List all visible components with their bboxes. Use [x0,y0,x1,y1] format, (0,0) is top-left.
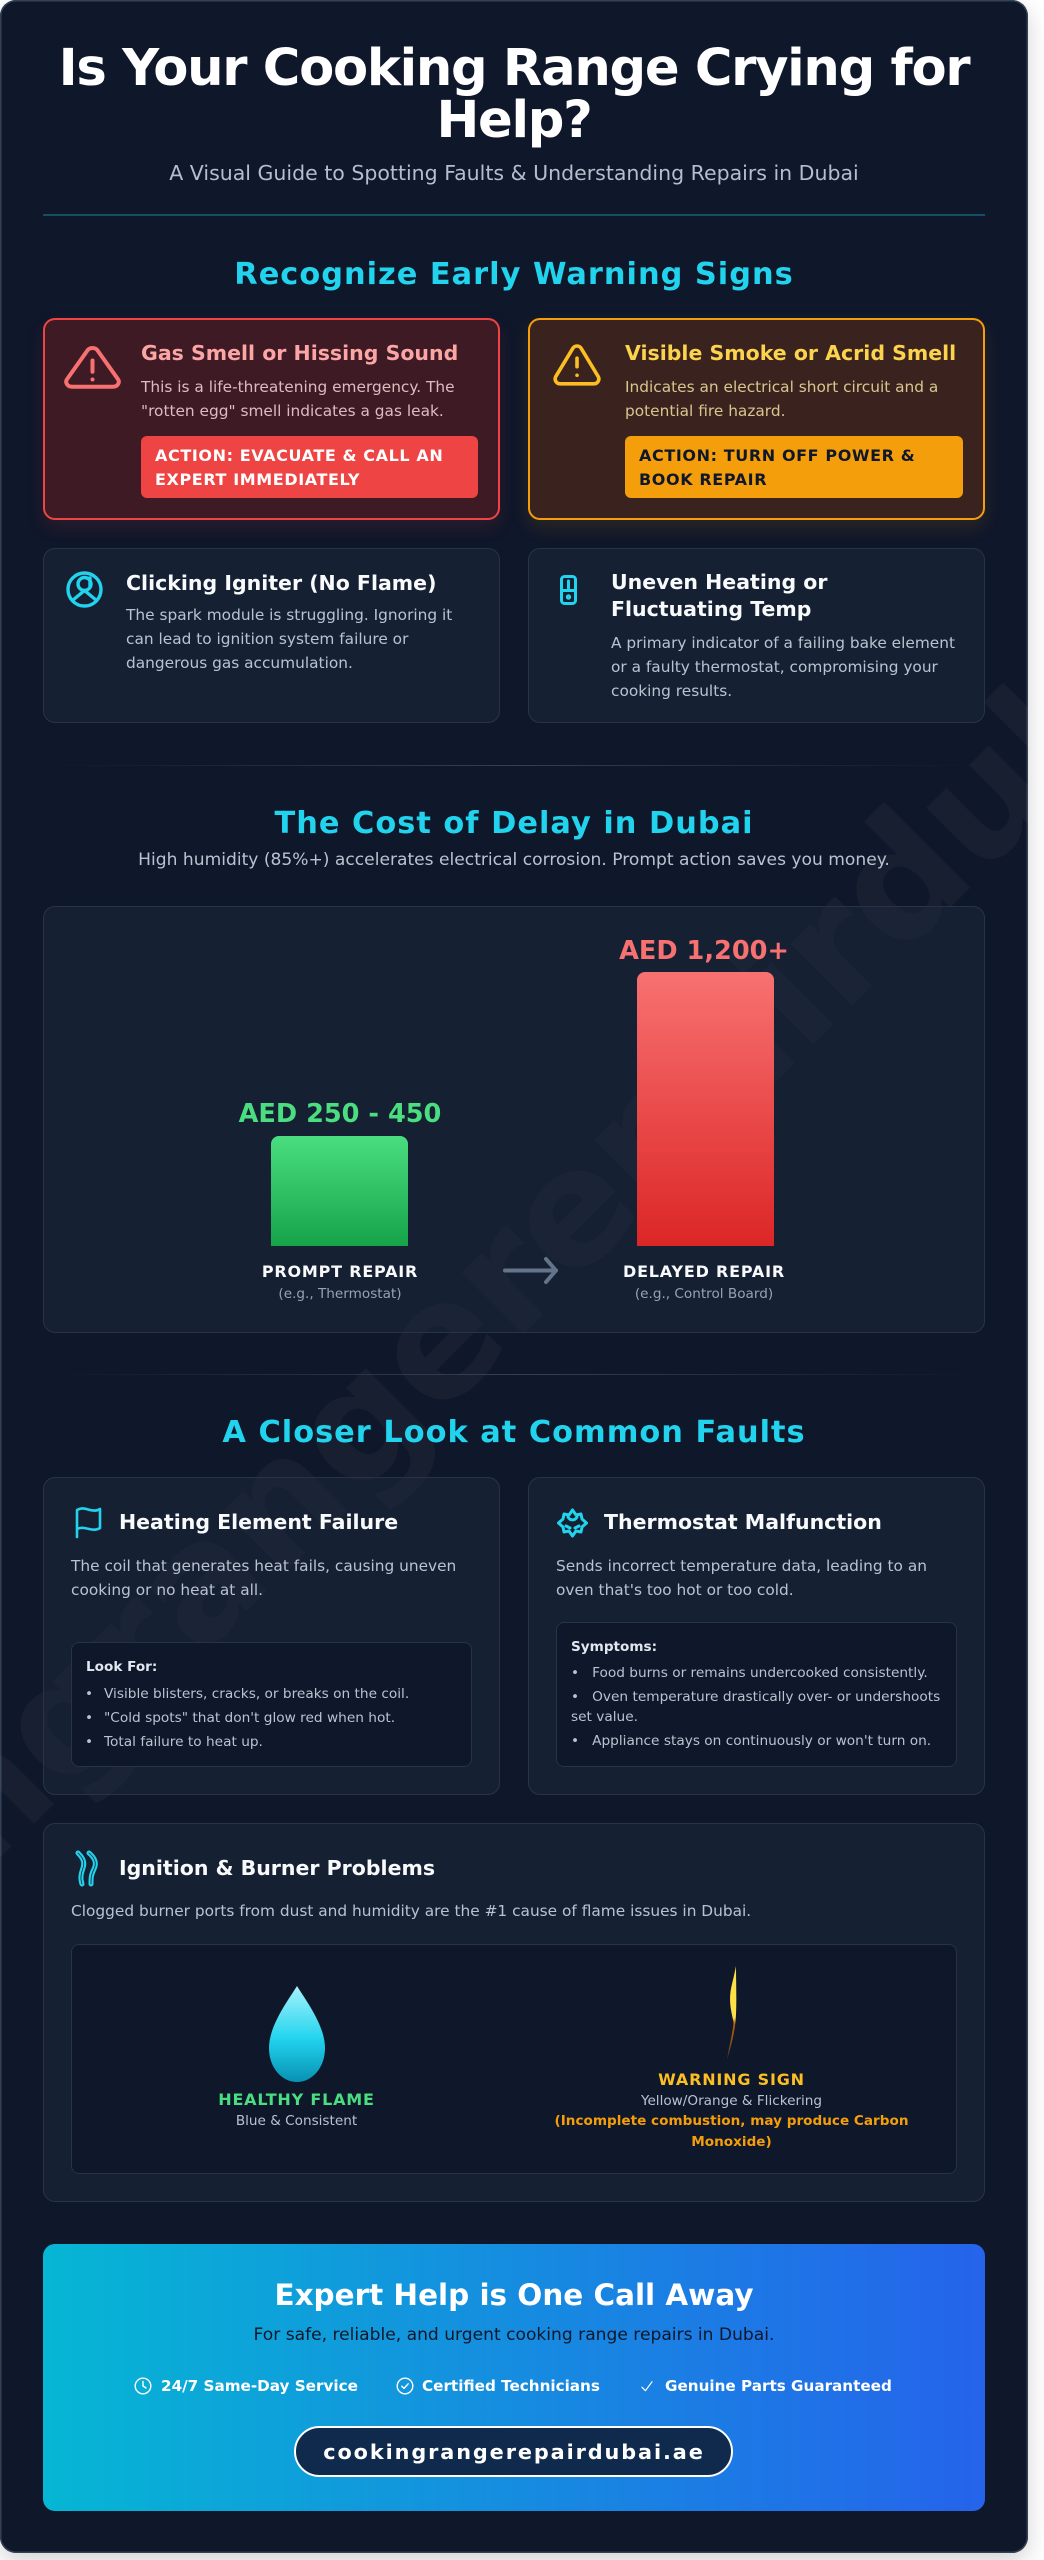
card text: cooking or no heat at all. [71,1581,263,1599]
note: blue and consistent: Blue & Consistent [236,2113,357,2129]
bar: delayed repair [637,972,774,1246]
action text: ACTION: EVACUATE & CALL AN [155,446,443,465]
list [104,1686,409,1750]
action box [625,436,963,498]
cta title: Expert Help is One Call Away [274,2278,754,2312]
look-for box [71,1642,472,1767]
card text: A primary indicator of a failing bake element [611,634,955,652]
action text [639,446,915,489]
card title: Uneven Heating or [611,570,827,594]
card title: Clicking Igniter (No Flame) [126,571,436,595]
note: carbon monoxide warning: (Incomplete combustion, may produce Carbon [554,2113,909,2129]
website address: cookingrangerepairdubai.ae [323,2440,705,2464]
card text: "rotten egg" smell indicates a gas leak. [141,402,444,420]
title [59,38,970,150]
label: delayed repair: DELAYED REPAIR [623,1262,785,1281]
label: warning sign: WARNING SIGN [658,2070,805,2089]
heading: early warning signs: Recognize Early Warning Signs [234,257,794,292]
feature: certified: Certified Technicians [422,2377,600,2395]
icon: thermostat [560,575,577,605]
action text: ACTION: TURN OFF POWER & [639,446,915,465]
card text [611,634,955,700]
list: "Cold spots" that don't glow red when hot. [104,1710,395,1726]
bullets [85,1686,93,1750]
icon: clock [134,2378,152,2394]
action text: BOOK REPAIR [639,470,767,489]
note: carbon monoxide warning [554,2113,909,2150]
card text: can lead to ignition system failure or [126,630,408,648]
note: yellow and flickering: Yellow/Orange & Flickering [641,2093,822,2109]
list: • Oven temperature drastically over- or undershoots [571,1689,940,1705]
card text: This is a life-threatening emergency. The [141,378,455,396]
icon: flag [76,1507,102,1538]
list: • Food burns or remains undercooked consistently. [571,1665,928,1681]
card title: Fluctuating Temp [611,597,811,621]
icon: red warning triangle [64,346,121,389]
action text: EXPERT IMMEDIATELY [155,470,360,489]
action box [141,436,478,498]
action text [155,446,443,489]
card text: potential fire hazard. [625,402,786,420]
icon: blue flame [269,1986,325,2082]
panel: call to action [43,2244,985,2511]
note: control board: (e.g., Control Board) [635,1286,773,1302]
header divider [43,214,985,216]
panel: gas smell [43,318,500,520]
bullets: • [85,1710,93,1726]
note: carbon monoxide warning: Monoxide) [691,2134,772,2150]
symptoms box [556,1622,957,1767]
panel: visible smoke [528,318,985,520]
panel: uneven heating [528,548,985,723]
title: Help? [436,90,592,150]
panel: thermostat malfunction [528,1477,985,1795]
card text: Indicates an electrical short circuit and a [625,378,938,396]
card title: Gas Smell or Hissing Sound [141,341,458,365]
card text [126,606,452,672]
icon: igniter wheel [66,571,103,608]
bullets: • [85,1686,93,1702]
card text [140,378,455,420]
panel: bar chart [43,906,985,1333]
card text: Sends incorrect temperature data, leading to an [556,1557,927,1575]
bar: prompt repair [271,1136,408,1246]
label: delayed cost: AED 1,200+ [619,936,789,966]
label: prompt cost: AED 250 - 450 [239,1099,441,1129]
website pill [294,2426,733,2477]
feature: genuine parts: Genuine Parts Guaranteed [665,2377,892,2395]
list: Total failure to heat up. [104,1734,263,1750]
card text: cooking results. [611,682,732,700]
label: healthy flame: HEALTHY FLAME [218,2090,375,2109]
card text: or a faulty thermostat, compromising your [611,658,938,676]
section subtitle: High humidity (85%+) accelerates electrical corrosion. Prompt action saves you money. [138,850,890,870]
card title: Ignition & Burner Problems [119,1856,435,1880]
card title: Thermostat Malfunction [604,1510,882,1534]
panel: clicking igniter [43,548,500,723]
feature: same-day: 24/7 Same-Day Service [161,2377,358,2395]
card text [625,378,938,420]
card text: oven that's too hot or too cold. [556,1581,794,1599]
icon: gear [556,1508,588,1538]
icon: badge check [396,2378,414,2394]
list: • Appliance stays on continuously or won't turn on. [571,1733,931,1749]
list [571,1665,940,1749]
heading: cost of delay: The Cost of Delay in Dubai [274,806,754,841]
card text [556,1557,927,1599]
subtitle: A Visual Guide to Spotting Faults & Understanding Repairs in Dubai [169,161,859,185]
label: prompt repair: PROMPT REPAIR [262,1262,418,1281]
icon: yellow flame [727,1966,736,2060]
bullets: • [85,1734,93,1750]
card title: Heating Element Failure [119,1510,398,1534]
card text: Clogged burner ports from dust and humidity are the #1 cause of flame issues in Dubai. [71,1902,751,1920]
card title [611,570,828,621]
arrow [503,1256,558,1284]
box heading: Look For: [86,1659,157,1675]
card text: The coil that generates heat fails, causing uneven [71,1557,456,1575]
note: thermostat: (e.g., Thermostat) [278,1286,402,1302]
list: set value. [571,1709,638,1725]
flame comparison box [71,1944,957,2174]
icon: amber warning triangle [553,344,601,386]
card text: The spark module is struggling. Ignoring it [126,606,452,624]
icon: check [641,2381,653,2392]
panel: heating element failure [43,1477,500,1795]
panel: ignition and burner problems [43,1823,985,2202]
title: Is Your Cooking Range Crying for [59,38,969,98]
icon: flame waves [76,1850,98,1886]
box heading: Symptoms: [571,1639,657,1655]
cta subtitle: For safe, reliable, and urgent cooking range repairs in Dubai. [254,2325,774,2345]
list: Visible blisters, cracks, or breaks on the coil. [104,1686,409,1702]
card text [70,1557,456,1599]
heading: common faults: A Closer Look at Common Faults [222,1415,806,1450]
card title: Visible Smoke or Acrid Smell [625,341,956,365]
card text: dangerous gas accumulation. [126,654,353,672]
